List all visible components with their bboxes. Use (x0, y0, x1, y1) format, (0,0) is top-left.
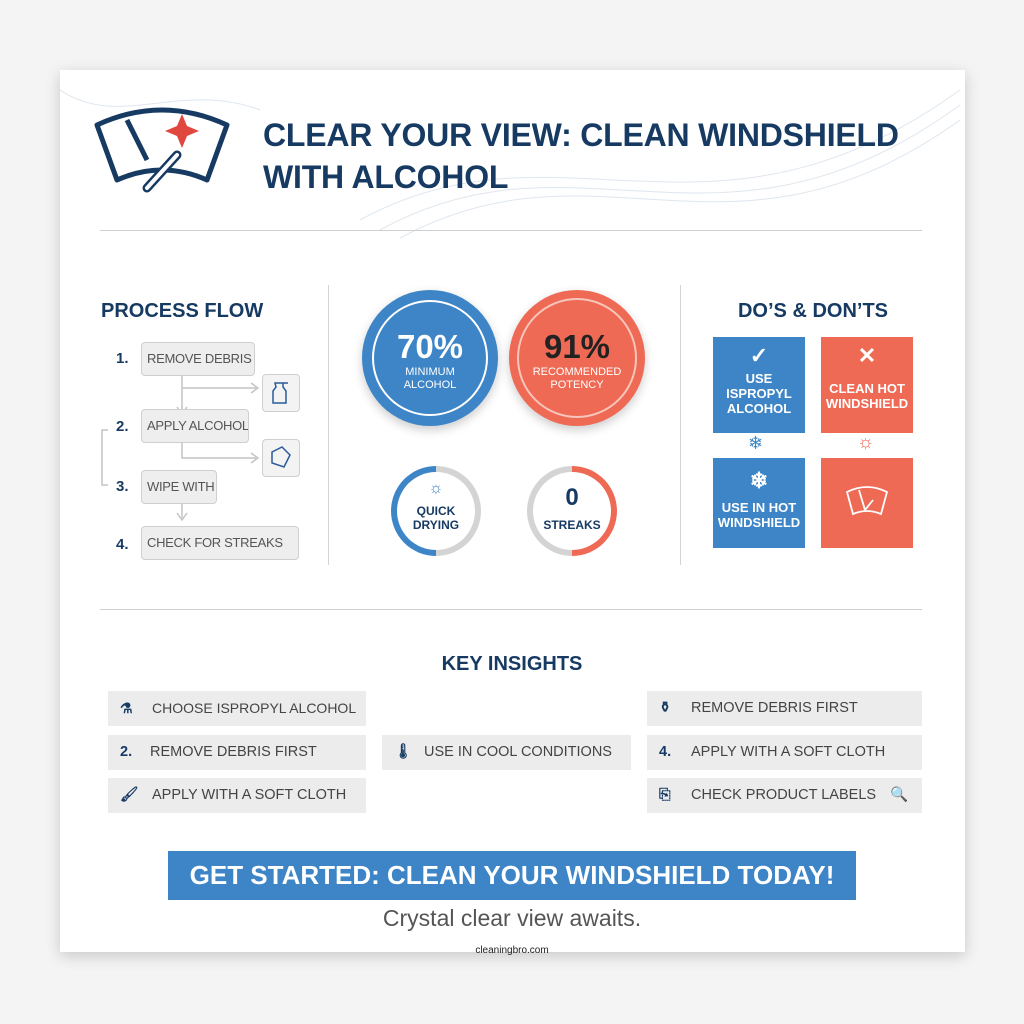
key insights list: REMOVE DEBRIS FIRST (691, 700, 858, 716)
stat: 91% (509, 290, 645, 426)
stat: 0 streaks: STREAKS (543, 518, 601, 532)
stat: 70%: 70% (397, 328, 463, 365)
tile: use isopropyl: ISPROPYL (726, 386, 792, 401)
key insights list: CHOOSE ISPROPYL ALCOHOL (152, 700, 356, 716)
step 3: 3. (116, 478, 129, 495)
icon: snowflake: ❄ (748, 433, 763, 453)
card (60, 70, 965, 952)
key insights list: ⚗ (120, 700, 133, 716)
step 1: 1. (116, 350, 129, 367)
tile: clean hot: WINDSHIELD (826, 396, 908, 411)
footer: cleaningbro.com (475, 945, 549, 956)
stat: quick drying (391, 466, 481, 556)
call to action banner: GET STARTED: CLEAN YOUR WINDSHIELD TODAY! (190, 860, 834, 890)
tile: use isopropyl (713, 337, 805, 433)
stat: 91%: 91% (544, 328, 610, 365)
tile: clean hot: ✕ (858, 343, 876, 368)
key insights list (108, 691, 922, 813)
tile: windshield icon (821, 458, 913, 548)
text: APPLY ALCOHOL (147, 418, 249, 433)
title: CLEAR YOUR VIEW: CLEAN WINDSHIELD (263, 117, 899, 153)
text: CHECK FOR STREAKS (147, 535, 283, 550)
key insights list: CHECK PRODUCT LABELS 🔍 (691, 787, 908, 803)
stat: 70% (362, 290, 498, 426)
tile: use isopropyl: ✓ (750, 343, 768, 368)
stat: quick drying: ☼ (429, 480, 443, 497)
tile: clean hot (821, 337, 913, 433)
tile: use in hot: WINDSHIELD (718, 515, 800, 530)
heading: process flow: PROCESS FLOW (101, 300, 263, 322)
icon: windshield wiper (94, 108, 230, 192)
text: REMOVE DEBRIS (147, 351, 251, 366)
tile: use in hot: ❄ (750, 468, 768, 493)
title: WITH ALCOHOL (263, 159, 508, 195)
tile: use in hot: USE IN HOT (722, 500, 796, 515)
key insights list: APPLY WITH A SOFT CLOTH (691, 744, 885, 760)
key insights list: 4. (659, 744, 671, 760)
stat: 91%: RECOMMENDED (533, 366, 621, 378)
key insights list: REMOVE DEBRIS FIRST (150, 744, 317, 760)
key insights list: ⚱ (659, 700, 671, 716)
tile: use isopropyl: ALCOHOL (727, 401, 791, 416)
call to action banner (168, 851, 856, 900)
heading: DO’S & DON’TS (738, 300, 888, 322)
heading: key insights: KEY INSIGHTS (442, 653, 582, 675)
stat: 0 streaks (527, 466, 617, 556)
title (263, 117, 899, 195)
tile: use isopropyl: USE (746, 371, 772, 386)
stat: 91%: POTENCY (550, 379, 604, 391)
stat: quick drying: QUICK (417, 504, 455, 518)
step 2: 2. (116, 418, 129, 435)
step 4: 4. (116, 536, 129, 553)
tile: use in hot (713, 458, 805, 548)
decorative waves (60, 90, 960, 238)
stat: 70%: MINIMUM (405, 366, 455, 378)
panel: do's & don'ts (713, 300, 913, 548)
icon: cloth (262, 439, 300, 477)
key insights list: ⎘ (659, 787, 671, 803)
tile: clean hot: CLEAN HOT (829, 381, 905, 396)
icon: spray bottle (262, 374, 300, 412)
stat: 0 streaks: 0 (565, 484, 579, 511)
flow connectors (101, 376, 259, 521)
icon: sun: ☼ (857, 432, 874, 453)
key insights list: APPLY WITH A SOFT CLOTH (152, 787, 346, 803)
key insights list: 🖌 (120, 787, 138, 803)
key insights list: 2. (120, 744, 132, 760)
stat: quick drying: DRYING (413, 518, 459, 532)
key insights list: 🌡 (394, 744, 412, 760)
key insights list: USE IN COOL CONDITIONS (424, 744, 612, 760)
subtitle: Crystal clear view awaits. (383, 905, 641, 931)
text: WIPE WITH (147, 479, 214, 494)
stat: 70%: ALCOHOL (404, 379, 456, 391)
